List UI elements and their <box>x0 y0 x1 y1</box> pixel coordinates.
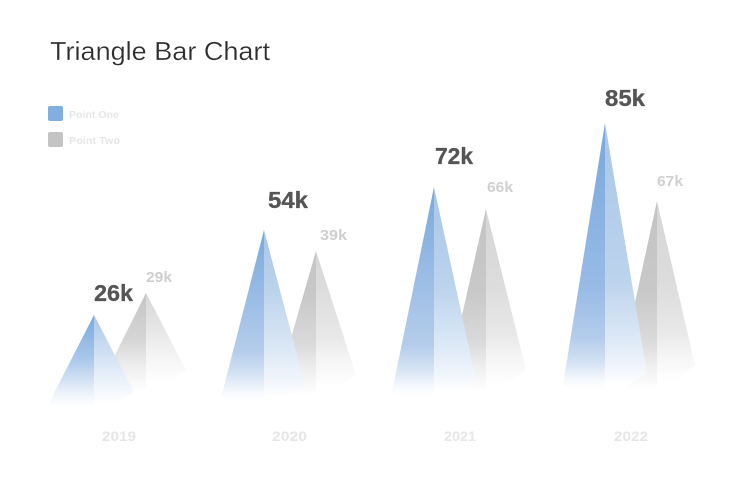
value 39k: 39k <box>320 228 348 244</box>
year 2022: 2022 <box>614 429 648 444</box>
value 54k: 54k <box>268 187 308 213</box>
gray triangle 2020 <box>276 251 356 405</box>
group: 2019 <box>49 270 186 444</box>
value 67k: 67k <box>657 174 684 190</box>
legend <box>48 106 120 147</box>
group: 2020 <box>221 187 356 444</box>
value 29k: 29k <box>146 270 173 286</box>
year 2020: 2020 <box>272 429 307 444</box>
value 66k: 66k <box>487 180 514 196</box>
blue triangle 2019 <box>49 315 134 420</box>
blue triangle 2021 <box>392 187 476 405</box>
value 85k: 85k <box>605 85 645 111</box>
legend item: Point One: Point One <box>69 109 119 121</box>
year 2019: 2019 <box>102 429 136 444</box>
gray triangle 2022 <box>617 201 695 400</box>
legend item: Point Two: Point Two <box>69 135 120 147</box>
blue triangle 2020 <box>221 230 305 412</box>
value 26k: 26k <box>94 280 133 306</box>
gray triangle 2019 <box>100 293 186 400</box>
blue triangle 2022 <box>563 123 647 400</box>
group: 2022 <box>563 85 695 444</box>
value 72k: 72k <box>435 143 473 169</box>
year 2021: 2021 <box>444 429 477 444</box>
title: Triangle Bar Chart <box>50 36 271 66</box>
gray triangle 2021 <box>446 209 526 400</box>
group: 2021 <box>392 143 526 444</box>
